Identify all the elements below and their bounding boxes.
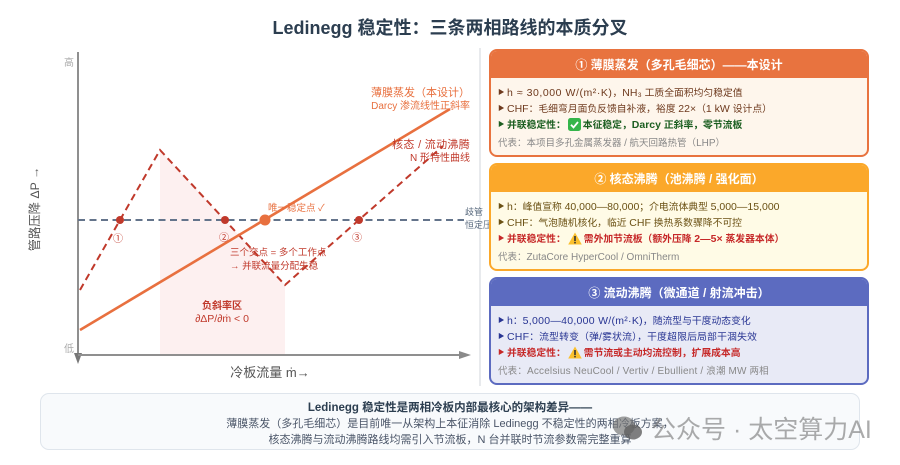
panel: nucleate boiling bbox=[489, 163, 869, 271]
panel 1 stability line: 并联稳定性： 本征稳定，Darcy 正斜率，零节流板 bbox=[507, 119, 742, 131]
negative slope region bbox=[160, 150, 285, 355]
panel: thin film evaporation: ▶ bbox=[498, 89, 504, 96]
panel 1 CHF line: CHF：毛细弯月面负反馈自补液，裕度 22×（1 kW 设计点） bbox=[507, 103, 772, 115]
panel: nucleate boiling: ▶ bbox=[498, 203, 504, 210]
nucleate flow boiling label: 核态 / 流动沸腾 bbox=[392, 137, 470, 151]
negative slope label bbox=[195, 299, 249, 325]
panel: thin film evaporation: ▶ bbox=[498, 121, 504, 128]
N curve sub label: N 形特性曲线 bbox=[410, 151, 470, 164]
panel: flow boiling: ▶ bbox=[498, 333, 505, 340]
manifold label bbox=[465, 206, 501, 230]
film evaporation line bbox=[80, 109, 450, 330]
footer line 2: 核态沸腾与流动沸腾路线均需引入节流板，N 台并联时节流参数需完整重算 bbox=[268, 434, 632, 446]
panel 2 heat transfer line: h：峰值宣称 40,000—80,000；介电流体典型 5,000—15,000 bbox=[507, 201, 780, 213]
stable point bbox=[260, 214, 270, 226]
marker 1 label: ① bbox=[113, 233, 123, 245]
panel 2 stability line: 并联稳定性： 需外加节流板（额外压降 2—5× 蒸发器本体） bbox=[507, 233, 784, 245]
panel: thin film evaporation bbox=[489, 49, 869, 157]
y axis title: 管路压降 ΔP → bbox=[27, 167, 42, 251]
negative slope label: ∂ΔP/∂ṁ < 0 bbox=[195, 313, 249, 325]
intersection point 3 bbox=[355, 216, 363, 224]
panel 1 header bbox=[491, 51, 867, 78]
panel 3 stability line: 并联稳定性： 需节流或主动均流控制，扩展成本高 bbox=[507, 348, 741, 359]
stable point label: 唯一稳定点 ✓ bbox=[268, 202, 325, 214]
panel: nucleate boiling: ▶ bbox=[498, 235, 504, 242]
panel 2 header bbox=[491, 165, 867, 192]
multiple intersections note: → 并联流量分配失稳 bbox=[230, 260, 319, 272]
axis end label high: 高 bbox=[64, 56, 74, 69]
panel 3 header bbox=[491, 279, 867, 306]
watermark text: 公众号 · 太空算力AI bbox=[651, 416, 872, 444]
film evaporation label: 薄膜蒸发（本设计） bbox=[371, 85, 470, 99]
film evaporation sub label: Darcy 渗流线性正斜率 bbox=[371, 99, 470, 112]
multiple intersections note: 三个交点 = 多个工作点 bbox=[230, 246, 327, 258]
panel: flow boiling: ▶ bbox=[498, 349, 504, 356]
intersection point 2 bbox=[221, 216, 229, 224]
footer heading: Ledinegg 稳定性是两相冷板内部最核心的架构差异—— bbox=[308, 402, 592, 414]
panel 1 representative line: 代表：本项目多孔金属蒸发器 / 航天回路热管（LHP） bbox=[498, 138, 725, 149]
panel 3 header: ③ 流动沸腾（微通道 / 射流冲击） bbox=[588, 286, 770, 300]
panel: flow boiling bbox=[489, 277, 869, 385]
footer line 1: 薄膜蒸发（多孔毛细芯）是目前唯一从架构上本征消除 Ledinegg 不稳定性的两相冷板方案， bbox=[226, 418, 674, 430]
chart: pressure drop vs flow bbox=[27, 52, 490, 380]
negative slope label: 负斜率区 bbox=[202, 299, 242, 312]
marker 3 label: ③ bbox=[352, 232, 362, 244]
manifold label: 歧管 bbox=[465, 206, 483, 217]
panel: thin film evaporation: ▶ bbox=[498, 105, 504, 112]
panel 2 CHF line: CHF：气泡随机核化，临近 CHF 换热系数骤降不可控 bbox=[507, 217, 742, 229]
panel 2 header: ② 核态沸腾（池沸腾 / 强化面） bbox=[594, 172, 764, 186]
panel 1 header: ① 薄膜蒸发（多孔毛细芯）——本设计 bbox=[575, 58, 783, 72]
panel divider bbox=[479, 48, 481, 386]
axis end label low: 低 bbox=[64, 342, 74, 355]
x axis title: 冷板流量 ṁ→ bbox=[230, 365, 310, 380]
intersection point 1 bbox=[116, 216, 124, 224]
panel 3 CHF line: CHF：流型转变（弹/雾状流），干度超限后局部干涸失效 bbox=[507, 331, 757, 343]
footer summary box bbox=[40, 393, 860, 450]
x axis bbox=[78, 351, 471, 359]
manifold constant pressure line bbox=[78, 219, 464, 221]
N-shaped boiling curve bbox=[80, 146, 443, 290]
panel: nucleate boiling: ▶ bbox=[498, 219, 504, 226]
marker 2 label: ② bbox=[219, 232, 229, 244]
title: Ledinegg 稳定性：三条两相路线的本质分叉 bbox=[272, 18, 628, 38]
panel: flow boiling: ▶ bbox=[498, 317, 504, 324]
y axis bbox=[74, 52, 82, 364]
panel 1 heat transfer line: h ≈ 30,000 W/(m²·K)，NH₃ 工质全面积均匀稳定值 bbox=[507, 87, 743, 99]
panel 3 representative line: 代表：Accelsius NeuCool / Vertiv / Ebullient / 浪潮 MW 两相 bbox=[498, 366, 769, 377]
multiple intersections note bbox=[230, 246, 327, 272]
panel 3 heat transfer line: h：5,000—40,000 W/(m²·K)，随流型与干度动态变化 bbox=[507, 315, 751, 327]
panel 2 representative line: 代表：ZutaCore HyperCool / OmniTherm bbox=[498, 252, 679, 263]
icon: watermark chat bubbles bbox=[613, 416, 642, 440]
